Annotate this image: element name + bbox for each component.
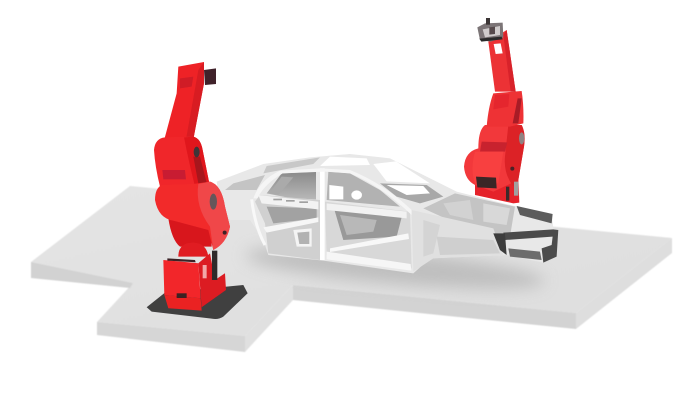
robot base plate (147, 285, 248, 319)
robot dark slot (476, 177, 497, 188)
robot body (464, 125, 525, 192)
rear door window (267, 172, 316, 199)
robot elbow link (154, 137, 209, 207)
rear door opening (255, 195, 320, 260)
robot gripper (204, 68, 216, 85)
robot upper arm (488, 30, 516, 92)
robot lower body (475, 178, 519, 203)
front crash structure (493, 206, 558, 263)
robot joint disc (519, 132, 524, 144)
robot shoulder body (155, 182, 230, 250)
left robot arm (147, 62, 248, 319)
front door window (327, 172, 400, 207)
concrete floor slab (31, 186, 672, 352)
robot base box (198, 253, 226, 307)
front door opening (325, 202, 412, 268)
robot upper arm (164, 62, 204, 139)
car body in white (217, 154, 558, 273)
right robot arm (464, 18, 525, 203)
A-pillar and front structure (412, 210, 503, 272)
robot joint disc (210, 194, 217, 210)
rear deck (225, 175, 265, 190)
strut slots (273, 199, 392, 212)
robot forearm link (487, 91, 523, 127)
robot waist (168, 218, 212, 247)
robot sensor head (477, 23, 503, 42)
engine bay (423, 193, 515, 238)
car silhouette (217, 154, 558, 273)
car shadow on floor (244, 239, 546, 297)
windscreen opening (373, 161, 430, 183)
